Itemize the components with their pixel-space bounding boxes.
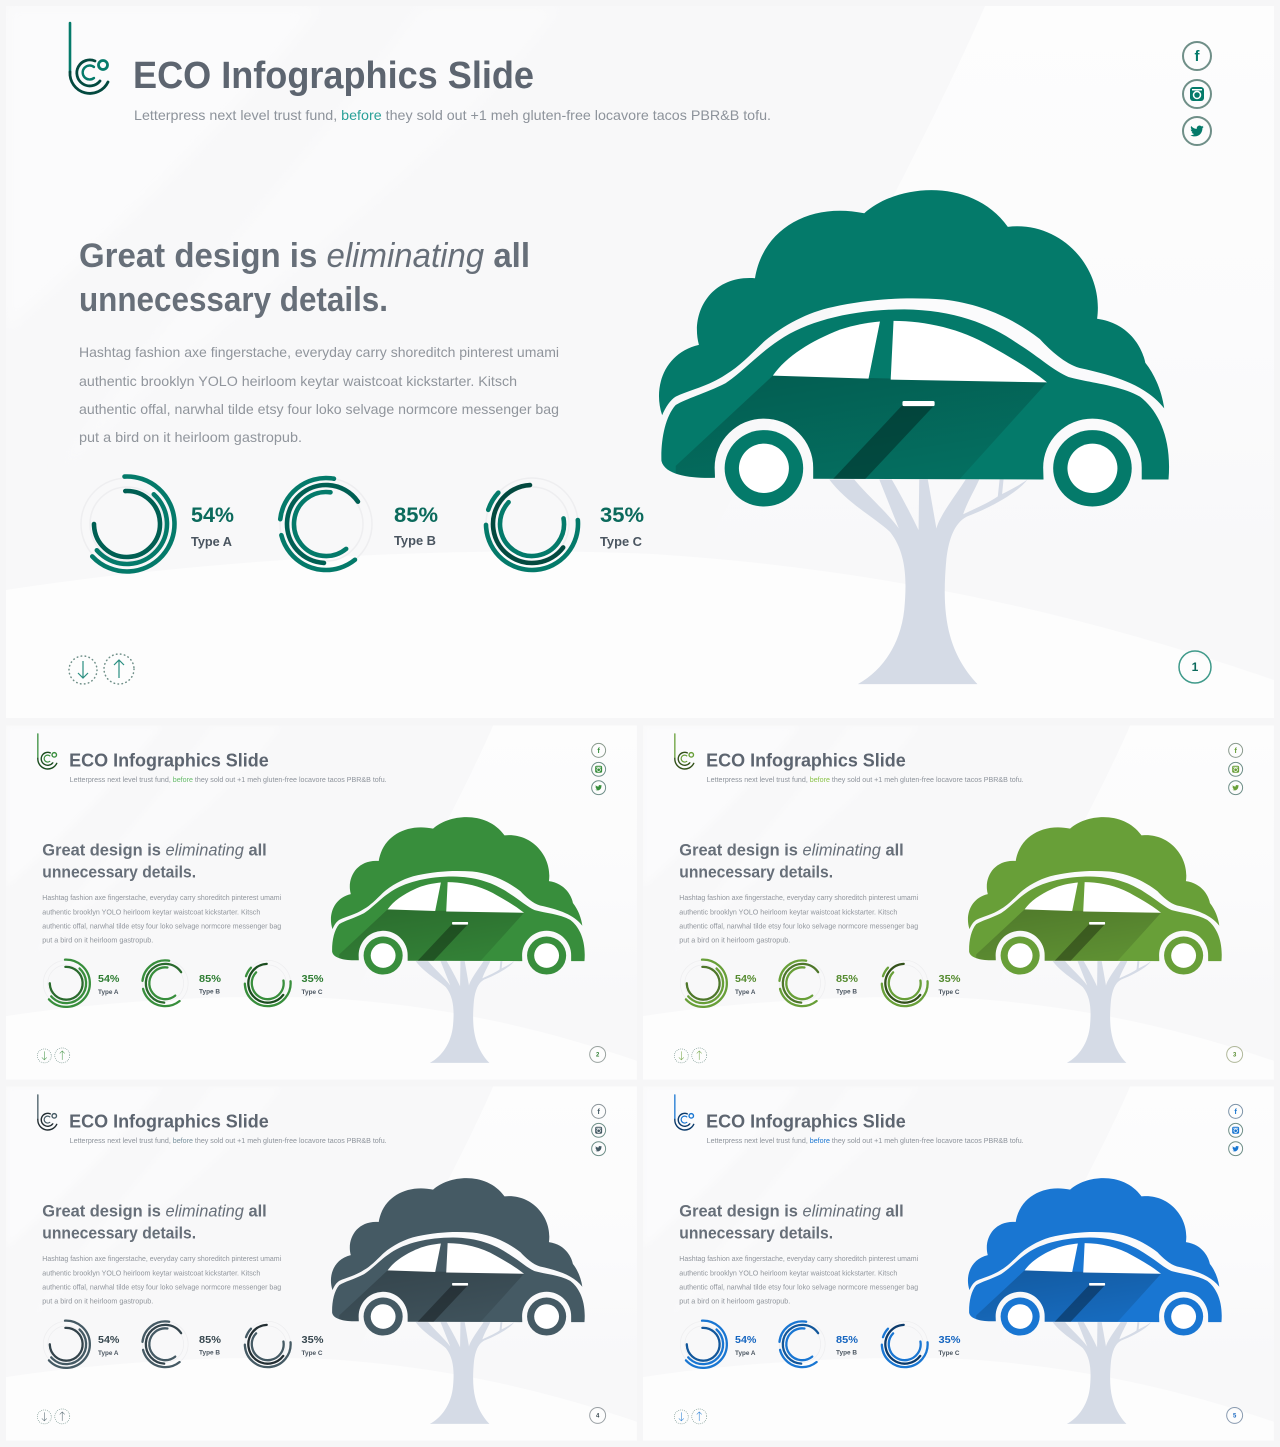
page number: 5 (1233, 1413, 1237, 1419)
subtitle: Letterpress next level trust fund, before they sold out +1 meh gluten-free locavore tacos PBR&B tofu. (70, 777, 387, 784)
ring chart: Type A: 54% (98, 974, 119, 985)
body paragraph: authentic brooklyn YOLO heirloom keytar waistcoat kickstarter. Kitsch (679, 910, 897, 917)
body paragraph: put a bird on it heirloom gastropub. (42, 937, 153, 944)
ring chart: Type A: Type A (735, 989, 756, 996)
body paragraph: put a bird on it heirloom gastropub. (42, 1298, 153, 1305)
ring chart: Type B: 85% (836, 1335, 858, 1346)
body paragraph: put a bird on it heirloom gastropub. (679, 1298, 790, 1305)
ring chart: Type A: Type A (98, 1350, 119, 1357)
panel background (6, 1086, 637, 1441)
title: ECO Infographics Slide (69, 1111, 269, 1132)
logo (38, 734, 57, 769)
ring chart: Type A (38, 955, 119, 1011)
social icons (592, 743, 606, 795)
title: ECO Infographics Slide (706, 750, 906, 771)
ring chart: Type C: 35% (939, 1335, 960, 1346)
ring chart: Type B (261, 459, 438, 589)
body paragraph (42, 1256, 282, 1305)
logo (675, 734, 694, 769)
ring chart: Type C: Type C (939, 989, 960, 996)
ring chart: Type A (675, 1316, 756, 1372)
ring chart: Type B: Type B (199, 1350, 220, 1357)
subtitle: Letterpress next level trust fund, before they sold out +1 meh gluten-free locavore tacos PBR&B tofu. (707, 777, 1024, 784)
ring chart: Type A: 54% (191, 504, 234, 527)
ring chart: Type B: Type B (836, 989, 857, 996)
ring chart: Type C: 35% (939, 974, 960, 985)
ring chart: Type C: Type C (302, 989, 323, 996)
body paragraph: authentic brooklyn YOLO heirloom keytar waistcoat kickstarter. Kitsch (42, 1271, 260, 1278)
illustration: car tree (331, 1178, 585, 1424)
ring chart: Type C: 35% (302, 1335, 323, 1346)
panel background (643, 726, 1274, 1080)
ring chart: Type C (474, 466, 644, 582)
ring chart: Type B (133, 951, 221, 1015)
illustration: car tree (659, 190, 1169, 684)
ring chart: Type C: Type C (600, 534, 643, 549)
body paragraph: authentic offal, narwhal tilde etsy four loko selvage normcore messenger bag (679, 1285, 918, 1292)
body paragraph (42, 895, 282, 944)
social icons: f (1234, 746, 1237, 755)
subtitle: Letterpress next level trust fund, before they sold out +1 meh gluten-free locavore tacos PBR&B tofu. (134, 107, 771, 123)
body paragraph: Hashtag fashion axe fingerstache, everyday carry shoreditch pinterest umami (42, 1256, 282, 1263)
panel: blue slide (643, 1086, 1274, 1441)
ring chart: Type B (133, 1312, 221, 1376)
ring chart: Type B: 85% (836, 974, 858, 985)
ring chart: Type B (770, 1312, 858, 1376)
ring chart: Type B: Type B (199, 989, 220, 996)
headline: Great design is eliminating all (679, 1201, 904, 1220)
body paragraph: authentic brooklyn YOLO heirloom keytar waistcoat kickstarter. Kitsch (79, 373, 517, 389)
ring chart: Type A: Type A (735, 1350, 756, 1357)
body paragraph: authentic brooklyn YOLO heirloom keytar waistcoat kickstarter. Kitsch (42, 910, 260, 917)
social icons (1229, 743, 1243, 795)
social icons (592, 1104, 606, 1156)
page number (590, 1046, 606, 1062)
body paragraph: Hashtag fashion axe fingerstache, everyday carry shoreditch pinterest umami (79, 344, 559, 360)
ring chart: Type B: 85% (199, 1335, 221, 1346)
ring chart: Type A (675, 955, 756, 1011)
ring chart: Type B: 85% (199, 974, 221, 985)
headline: Great design is eliminating all (79, 237, 530, 275)
navigation arrows (674, 1409, 707, 1424)
ring chart: Type C (239, 1315, 323, 1373)
headline: Great design is eliminating all (42, 1201, 267, 1220)
ring chart: Type B (770, 951, 858, 1015)
body paragraph (679, 1256, 919, 1305)
body paragraph: put a bird on it heirloom gastropub. (679, 937, 790, 944)
ring chart: Type A: Type A (98, 989, 119, 996)
ring chart: Type C: 35% (302, 974, 323, 985)
headline: Great design is eliminating all (679, 840, 904, 859)
ring chart: Type A (71, 468, 234, 580)
subtitle: Letterpress next level trust fund, before they sold out +1 meh gluten-free locavore tacos PBR&B tofu. (707, 1138, 1024, 1145)
panel background (6, 726, 637, 1080)
page number (1179, 651, 1211, 683)
headline (679, 840, 904, 881)
headline: unnecessary details. (679, 1223, 833, 1242)
body paragraph (679, 895, 919, 944)
panel: slate slide (6, 1086, 637, 1441)
ring chart: Type A: 54% (735, 1335, 756, 1346)
logo (70, 23, 108, 93)
page number (1227, 1046, 1243, 1062)
title: ECO Infographics Slide (133, 55, 534, 97)
ring chart: Type C: Type C (302, 1350, 323, 1357)
page number: 2 (596, 1052, 600, 1058)
body paragraph: Hashtag fashion axe fingerstache, everyday carry shoreditch pinterest umami (679, 895, 919, 902)
ring chart: Type A: Type A (191, 534, 233, 549)
ring chart: Type B: 85% (394, 504, 438, 527)
social icons: f (1234, 1107, 1237, 1116)
page number: 4 (596, 1413, 600, 1419)
ring chart: Type B: Type B (394, 533, 436, 548)
body paragraph: put a bird on it heirloom gastropub. (79, 429, 302, 445)
headline (42, 1201, 267, 1242)
body paragraph: Hashtag fashion axe fingerstache, everyday carry shoreditch pinterest umami (679, 1256, 919, 1263)
navigation arrows (37, 1409, 70, 1424)
headline (42, 840, 267, 881)
ring chart: Type A: 54% (735, 974, 756, 985)
social icons: f (1194, 48, 1200, 65)
headline: Great design is eliminating all (42, 840, 267, 859)
page number: 1 (1192, 660, 1199, 674)
ring chart: Type A: 54% (98, 1335, 119, 1346)
title: ECO Infographics Slide (706, 1111, 906, 1132)
subtitle: Letterpress next level trust fund, before they sold out +1 meh gluten-free locavore tacos PBR&B tofu. (70, 1138, 387, 1145)
logo (38, 1095, 57, 1130)
social icons: f (597, 1107, 600, 1116)
logo (675, 1095, 694, 1130)
headline (79, 237, 530, 319)
body paragraph: authentic offal, narwhal tilde etsy four loko selvage normcore messenger bag (42, 1285, 281, 1292)
headline: unnecessary details. (79, 281, 388, 319)
illustration: car tree (968, 1178, 1222, 1424)
title: ECO Infographics Slide (69, 750, 269, 771)
ring chart: Type C: Type C (939, 1350, 960, 1357)
navigation arrows (674, 1048, 707, 1063)
headline (679, 1201, 904, 1242)
page number (590, 1407, 606, 1423)
headline: unnecessary details. (679, 862, 833, 881)
ring chart: Type C (239, 954, 323, 1012)
social icons (1183, 42, 1211, 145)
body paragraph: authentic brooklyn YOLO heirloom keytar waistcoat kickstarter. Kitsch (679, 1271, 897, 1278)
headline: unnecessary details. (42, 1223, 196, 1242)
body paragraph: authentic offal, narwhal tilde etsy four loko selvage normcore messenger bag (679, 924, 918, 931)
ring chart: Type C (876, 954, 960, 1012)
body paragraph (79, 344, 559, 445)
panel: lime slide (643, 726, 1274, 1080)
illustration: car tree (331, 817, 585, 1063)
ring chart: Type A (38, 1316, 119, 1372)
ring chart: Type C: 35% (600, 504, 644, 527)
illustration: car tree (968, 817, 1222, 1063)
social icons (1229, 1104, 1243, 1156)
ring chart: Type B: Type B (836, 1350, 857, 1357)
ring chart: Type C (876, 1315, 960, 1373)
panel background (643, 1086, 1274, 1441)
headline: unnecessary details. (42, 862, 196, 881)
page number (1227, 1407, 1243, 1423)
panel: main teal slide (6, 6, 1274, 718)
page number: 3 (1233, 1052, 1237, 1058)
panel background (6, 6, 1274, 718)
navigation arrows (69, 654, 134, 684)
panel: green slide (6, 726, 637, 1080)
body paragraph: Hashtag fashion axe fingerstache, everyday carry shoreditch pinterest umami (42, 895, 282, 902)
body paragraph: authentic offal, narwhal tilde etsy four loko selvage normcore messenger bag (79, 401, 559, 417)
navigation arrows (37, 1048, 70, 1063)
body paragraph: authentic offal, narwhal tilde etsy four loko selvage normcore messenger bag (42, 924, 281, 931)
social icons: f (597, 746, 600, 755)
